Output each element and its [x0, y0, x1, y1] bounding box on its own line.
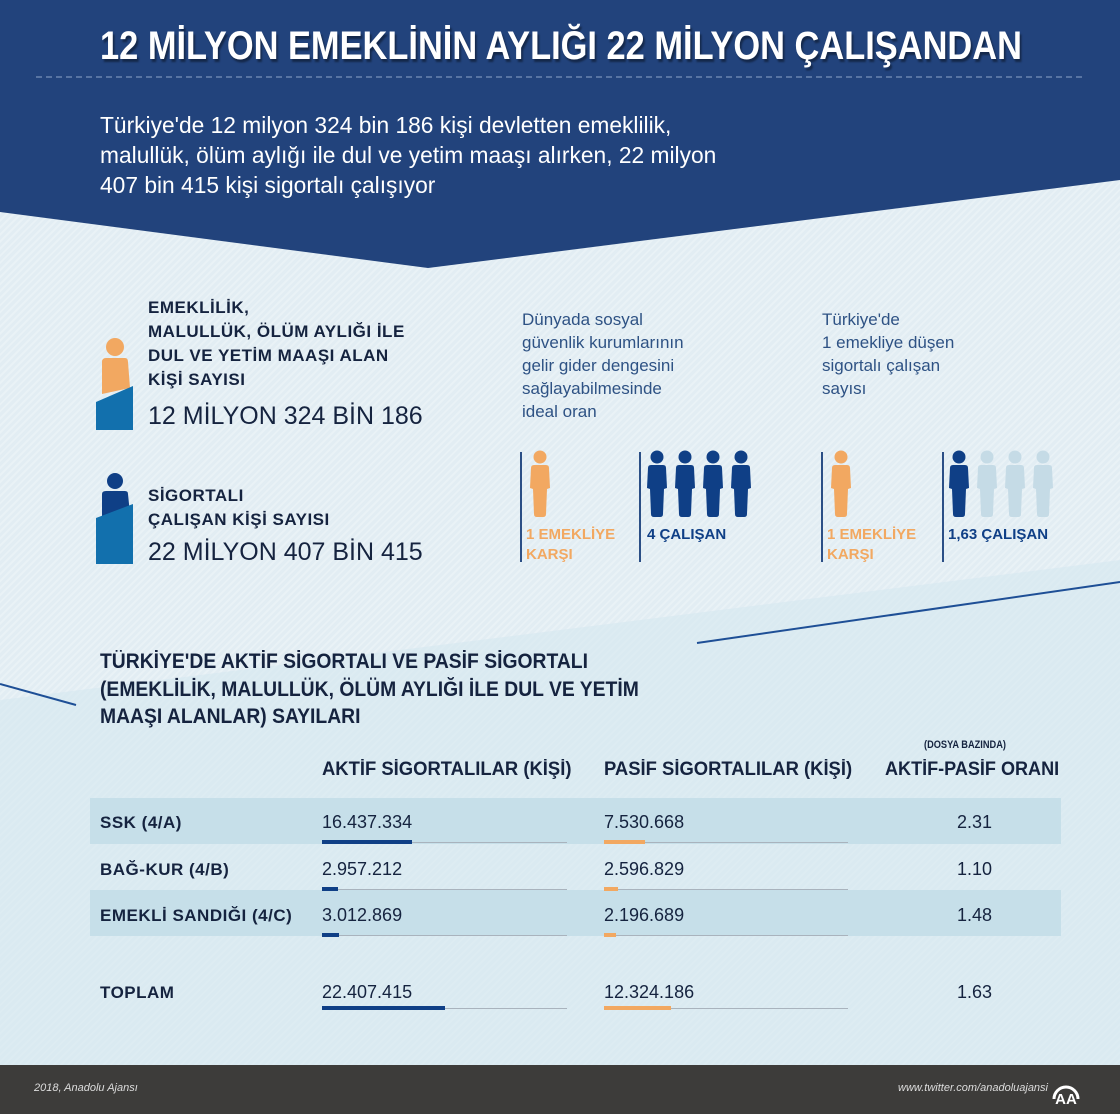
table: 1.48: [957, 905, 992, 925]
intro text: malullük, ölüm aylığı ile dul ve yetim maaşı alırken, 22 milyon: [100, 142, 716, 168]
intro text: 407 bin 415 kişi sigortalı çalışıyor: [100, 172, 435, 198]
table: 7.530.668: [604, 812, 684, 832]
text: ideal ratio: sağlayabilmesinde: [522, 379, 662, 398]
heading: EMEKLİLİK,: [148, 298, 249, 317]
row: Toplam: TOPLAM: [100, 983, 174, 1002]
text: ideal ratio: gelir gider dengesini: [522, 356, 674, 375]
table: PASİF SİGORTALILAR (KİŞİ): [604, 759, 852, 780]
heading: ÇALIŞAN KİŞİ SAYISI: [148, 510, 330, 529]
text: turkey ratio: 1 emekliye düşen: [822, 333, 954, 352]
panel: insured workers count: [96, 473, 423, 566]
intro text: Türkiye'de 12 milyon 324 bin 186 kişi devletten emeklilik,: [100, 112, 671, 138]
row: Bağ-Kur: BAĞ-KUR (4/B): [100, 860, 229, 879]
header banner: [0, 0, 1120, 268]
title: 12 MİLYON EMEKLİNİN AYLIĞI 22 MİLYON ÇALIŞANDAN: [100, 24, 1022, 68]
text: turkey ratio: [822, 310, 954, 398]
heading: [148, 298, 405, 389]
icons: ideal ratio people: [530, 450, 751, 517]
label: 1,63 çalışan: 1,63 ÇALIŞAN: [948, 526, 1048, 543]
heading: MALULLÜK, ÖLÜM AYLIĞI İLE: [148, 322, 405, 341]
table: 2.957.212: [322, 859, 402, 879]
row: Emekli Sandığı: EMEKLİ SANDIĞI (4/C): [100, 906, 292, 925]
table: 1.63: [957, 982, 992, 1002]
text: turkey ratio: Türkiye'de: [822, 310, 900, 329]
text: ideal ratio: güvenlik kurumlarının: [522, 333, 684, 352]
table: 1.10: [957, 859, 992, 879]
text: turkey ratio: sigortalı çalışan: [822, 356, 940, 375]
table: 2.596.829: [604, 859, 684, 879]
icon: retiree on podium: [96, 338, 133, 430]
heading: [148, 486, 330, 529]
label: 1 emekliye karşı: 1 EMEKLİYE: [526, 526, 615, 543]
table: (DOSYA BAZINDA): [924, 739, 1006, 751]
label: 1 emekliye karşı: KARŞI: [526, 546, 573, 563]
footer: [0, 1065, 1120, 1114]
intro text: [100, 112, 716, 198]
label: 1 emekliye karşı: KARŞI: [827, 546, 874, 563]
number: 22 MİLYON 407 BİN 415: [148, 538, 423, 566]
table: 12.324.186: [604, 982, 694, 1002]
number: 12 MİLYON 324 BİN 186: [148, 402, 423, 430]
heading: SİGORTALI: [148, 486, 244, 505]
row: SSK: SSK (4/A): [100, 813, 182, 832]
icons: turkey ratio people: [831, 450, 1053, 517]
table: 2.31: [957, 812, 992, 832]
heading: DUL VE YETİM MAAŞI ALAN: [148, 346, 389, 365]
table: 16.437.334: [322, 812, 412, 832]
table heading: TÜRKİYE'DE AKTİF SİGORTALI VE PASİF SİGORTALI: [100, 650, 588, 673]
label: 1 emekliye karşı: [526, 526, 615, 563]
heading: KİŞİ SAYISI: [148, 370, 245, 389]
table: 22.407.415: [322, 982, 412, 1002]
text: ideal ratio: [522, 310, 684, 421]
table heading: (EMEKLİLİK, MALULLÜK, ÖLÜM AYLIĞI İLE DUL VE YETİM: [100, 678, 639, 700]
text: turkey ratio: sayısı: [822, 379, 866, 398]
label: 4 çalışan: 4 ÇALIŞAN: [647, 526, 726, 543]
icon: worker on podium: [96, 473, 133, 564]
text: ideal ratio: Dünyada sosyal: [522, 310, 643, 329]
icon: AA logo: [1052, 1086, 1080, 1107]
table heading: MAAŞI ALANLAR) SAYILARI: [100, 705, 360, 728]
panel: retirees count: [96, 298, 423, 430]
table: 2.196.689: [604, 905, 684, 925]
table heading: [100, 650, 639, 728]
text: ideal ratio: ideal oran: [522, 402, 597, 421]
label: 1 emekliye karşı: 1 EMEKLİYE: [827, 526, 916, 543]
table: 3.012.869: [322, 905, 402, 925]
table: [90, 739, 1061, 1010]
label: 1 emekliye karşı: [827, 526, 916, 563]
twitter url: www.twitter.com/anadoluajansi: [898, 1082, 1048, 1094]
column headers: AKTİF SİGORTALILAR (KİŞİ): [322, 759, 571, 780]
table: AKTİF-PASİF ORANI: [885, 759, 1059, 780]
credit: 2018, Anadolu Ajansı: [34, 1082, 138, 1094]
